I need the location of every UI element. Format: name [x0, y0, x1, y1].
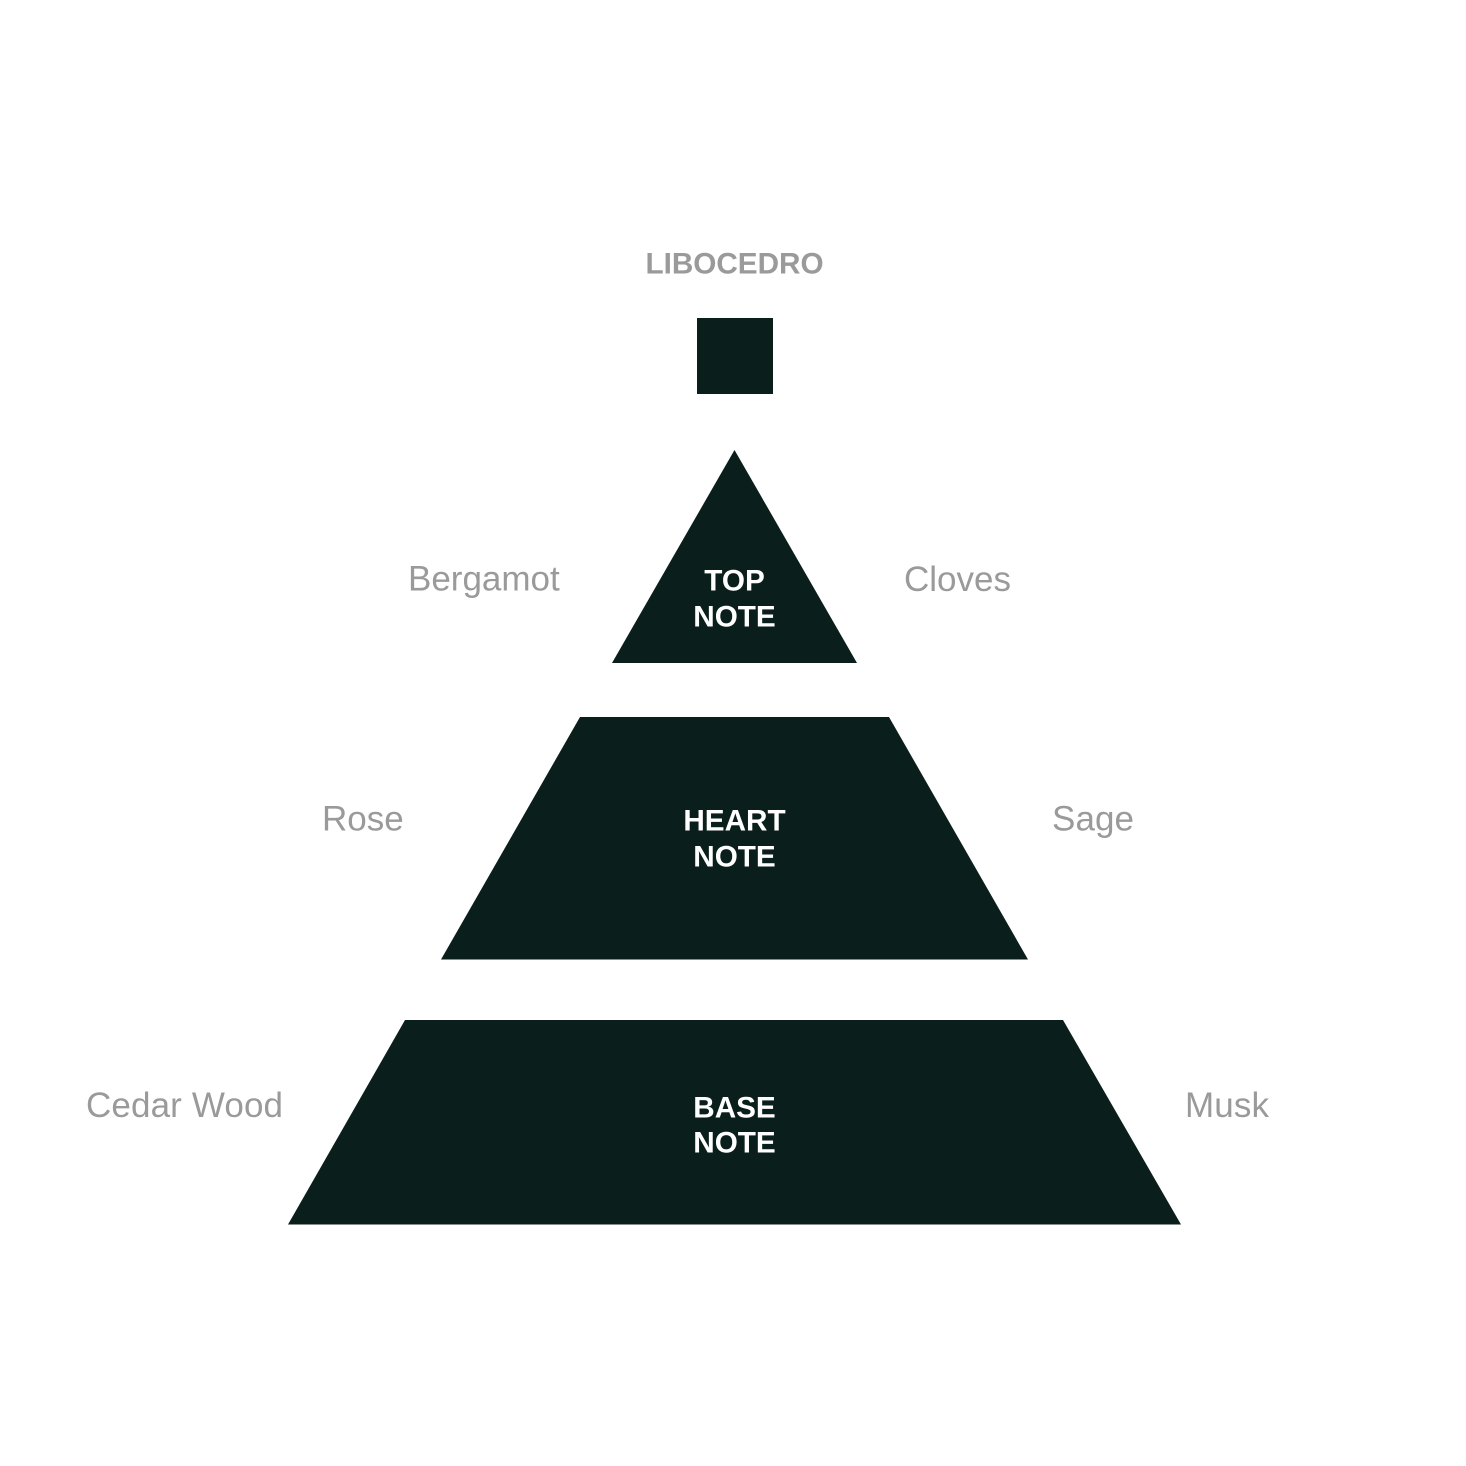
label: Cloves: Cloves	[904, 560, 1011, 599]
tier: top note	[612, 450, 857, 663]
label: Bergamot: Bergamot	[408, 560, 560, 598]
tier: base note: BASE	[693, 1092, 776, 1124]
tier: base note: NOTE	[693, 1126, 776, 1160]
tier: heart note	[441, 717, 1028, 960]
tier: heart note: HEART	[683, 804, 786, 838]
label: Cedar Wood: Cedar Wood	[86, 1086, 283, 1125]
tier: top note: TOP	[704, 564, 765, 598]
label: Sage: Sage	[1052, 800, 1134, 838]
tier: top note: NOTE	[693, 600, 776, 634]
tier: heart note: NOTE	[693, 840, 776, 874]
label: Musk: Musk	[1185, 1086, 1270, 1125]
tier: base note	[288, 1020, 1181, 1224]
title: LIBOCEDRO	[645, 248, 824, 280]
icon: square	[697, 318, 773, 394]
label: Rose: Rose	[322, 800, 404, 838]
